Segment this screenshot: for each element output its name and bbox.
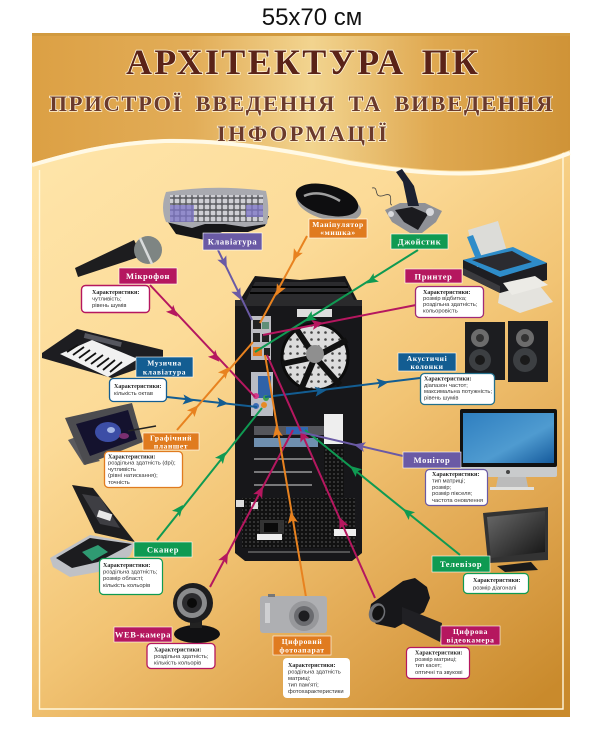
- card: speakers characteristics: Характеристики:: [424, 376, 472, 382]
- label: WEB-камера: [114, 627, 172, 642]
- card: webcam characteristics: Характеристики:: [154, 648, 202, 654]
- expansion slots: [254, 414, 344, 497]
- label: Маніпулятор мишка: [309, 219, 367, 238]
- label: Музична клавіатура: Музична: [147, 358, 182, 368]
- wire: camera: [265, 355, 306, 597]
- icon: scanner: [50, 485, 135, 577]
- card: tablet characteristics: Характеристики:: [108, 454, 156, 460]
- title: АРХІТЕКТУРА ПК: [126, 42, 478, 82]
- card: video camera characteristics: розмір матриці;: [415, 657, 457, 663]
- icon: mouse: [292, 178, 365, 228]
- label: Музична клавіатура: [136, 357, 193, 377]
- label: Телевізор: [432, 556, 490, 572]
- card: scanner characteristics: Характеристики:: [103, 563, 151, 569]
- icon: digital camera: [260, 594, 327, 633]
- card: microphone characteristics: чутливість;: [92, 296, 122, 302]
- card: video camera characteristics: [406, 648, 470, 678]
- card: monitor characteristics: розмір пікселя;: [432, 491, 473, 497]
- label: Мікрофон: Мікрофон: [126, 271, 170, 281]
- icon: monitor: [460, 409, 557, 490]
- card: camera characteristics: Характеристики:: [288, 663, 336, 669]
- label: Монітор: Монітор: [414, 455, 450, 465]
- card: scanner characteristics: кількість кольорів: [103, 583, 150, 589]
- card: webcam characteristics: кількість кольорів: [154, 660, 201, 666]
- card: scanner characteristics: роздільна здатність;: [103, 570, 158, 576]
- power supply: [236, 498, 356, 552]
- card: printer characteristics: кольоровість: [423, 308, 458, 314]
- icon: printer: [463, 221, 553, 313]
- card: speakers characteristics: [420, 374, 494, 404]
- wire: mouse: [260, 236, 307, 323]
- icon: webcam: [173, 583, 220, 643]
- icon: joystick: [372, 169, 442, 233]
- wire: tablet: [177, 342, 253, 430]
- title: ПРИСТРОЇ ВВЕДЕННЯ ТА ВИВЕДЕННЯ: [50, 91, 552, 116]
- card: speakers characteristics: рівень шумів: [424, 396, 458, 402]
- card: camera characteristics: матриці;: [288, 676, 311, 682]
- card: tablet characteristics: точність: [108, 480, 130, 486]
- label: Цифрова відеокамера: відеокамера: [447, 636, 494, 644]
- label: Монітор: [403, 452, 461, 468]
- icon: video camera: [366, 578, 442, 642]
- icon: graphics tablet: [65, 403, 156, 465]
- card: webcam characteristics: роздільна здатність;: [154, 654, 209, 660]
- card: camera characteristics: роздільна здатність: [288, 670, 341, 676]
- label: Сканер: [134, 542, 192, 557]
- label: Цифровий фотоапарат: [273, 636, 331, 655]
- label: Клавіатура: Клавіатура: [208, 236, 257, 246]
- card: scanner characteristics: [100, 558, 162, 594]
- card: camera characteristics: фотохарактеристики: [288, 689, 344, 695]
- card: microphone characteristics: рівень шумів: [92, 303, 126, 309]
- label: Цифровий фотоапарат: фотоапарат: [279, 646, 325, 654]
- wire: printer: [263, 305, 416, 335]
- card: tablet characteristics: [104, 452, 182, 488]
- size caption: 55x70 см: [262, 4, 362, 31]
- label: Джойстик: [391, 234, 448, 249]
- card: monitor characteristics: частота оновлення: [432, 498, 483, 504]
- label: Мікрофон: [119, 268, 177, 284]
- icon: speakers: [465, 321, 548, 382]
- label: Маніпулятор мишка: Маніпулятор: [312, 220, 364, 229]
- card: tablet characteristics: чутливість: [108, 467, 136, 473]
- label: Музична клавіатура: клавіатура: [143, 368, 186, 376]
- card: printer characteristics: розмір відбитка;: [423, 296, 467, 302]
- card: TV characteristics: розмір діагоналі: [473, 586, 516, 592]
- card: speakers characteristics: максимальна потужність;: [424, 389, 492, 395]
- card: monitor characteristics: Характеристики:: [432, 472, 480, 478]
- wire: speakers: [265, 377, 420, 397]
- card: tablet characteristics: роздільна здатність (dpi);: [108, 460, 176, 466]
- label: WEB-камера: WEB-камера: [115, 630, 171, 640]
- card: video camera characteristics: Характеристики:: [415, 650, 463, 656]
- card: camera characteristics: [283, 658, 350, 698]
- label: Акустичні колонки: Акустичні: [407, 354, 447, 363]
- label: Сканер: Сканер: [147, 544, 179, 554]
- wire: monitor: [300, 432, 403, 456]
- label: Акустичні колонки: [398, 353, 456, 371]
- label: Клавіатура: [203, 233, 262, 250]
- card: microphone characteristics: Характеристики:: [92, 290, 140, 296]
- title: [50, 42, 552, 146]
- label: Джойстик: Джойстик: [398, 236, 441, 246]
- wire: joystick: [255, 250, 418, 352]
- card: speakers characteristics: діапазон частот;: [424, 383, 468, 389]
- card: tablet characteristics: (рівні натискання);: [108, 473, 158, 479]
- card: printer characteristics: Характеристики:: [423, 290, 471, 296]
- card: monitor characteristics: розмір;: [432, 485, 452, 491]
- wire: TV: [305, 430, 460, 555]
- card: scanner characteristics: розмір області;: [103, 576, 144, 582]
- icon: keyboard: [163, 188, 269, 240]
- wire: scanner: [157, 408, 262, 540]
- icon: TV: [483, 507, 548, 572]
- label: Принтер: [405, 269, 462, 283]
- wire: music keyboard: [167, 395, 257, 409]
- card: printer characteristics: [416, 286, 484, 318]
- label: Графічний планшет: [143, 433, 199, 450]
- label: Цифрова відеокамера: Цифрова: [453, 627, 488, 636]
- card: video camera characteristics: оптичні та звукові: [415, 670, 463, 676]
- title: ІНФОРМАЦІЇ: [217, 121, 387, 146]
- card: monitor characteristics: тип матриці;: [432, 478, 465, 484]
- I/O panel: [251, 316, 273, 416]
- label: Акустичні колонки: колонки: [410, 362, 444, 371]
- connection wires: [150, 236, 460, 598]
- icon: microphone: [75, 236, 162, 277]
- card: TV characteristics: Характеристики:: [473, 578, 521, 584]
- label: Цифровий фотоапарат: Цифровий: [282, 637, 322, 646]
- card: monitor characteristics: [426, 470, 488, 506]
- card: video camera characteristics: тип касет;: [415, 663, 442, 669]
- wire: microphone: [150, 285, 255, 397]
- card: music keyboard characteristics: кількість октав: [114, 391, 153, 397]
- label: Телевізор: Телевізор: [440, 559, 482, 569]
- card: music keyboard characteristics: [110, 378, 166, 402]
- wire: keyboard: [217, 250, 252, 320]
- fan: [282, 324, 348, 392]
- icon: music keyboard: [42, 329, 163, 378]
- wire: webcam: [210, 430, 293, 587]
- label: Маніпулятор мишка: «мишка»: [320, 228, 356, 237]
- system unit (PC tower, rear): [235, 276, 362, 561]
- card: printer characteristics: роздільна здатність;: [423, 302, 478, 308]
- header banner with wave: [32, 33, 570, 174]
- wire: video camera: [267, 355, 375, 598]
- label: Принтер: Принтер: [414, 272, 453, 282]
- label: Графічний планшет: планшет: [154, 442, 188, 450]
- card: TV characteristics: [464, 574, 528, 594]
- label: Цифрова відеокамера: [441, 626, 500, 645]
- card: microphone characteristics: [82, 286, 150, 312]
- card: camera characteristics: тип пам'яті;: [288, 682, 319, 688]
- card: music keyboard characteristics: Характеристики:: [114, 384, 162, 390]
- label: Графічний планшет: Графічний: [150, 434, 192, 442]
- card: webcam characteristics: [147, 644, 215, 668]
